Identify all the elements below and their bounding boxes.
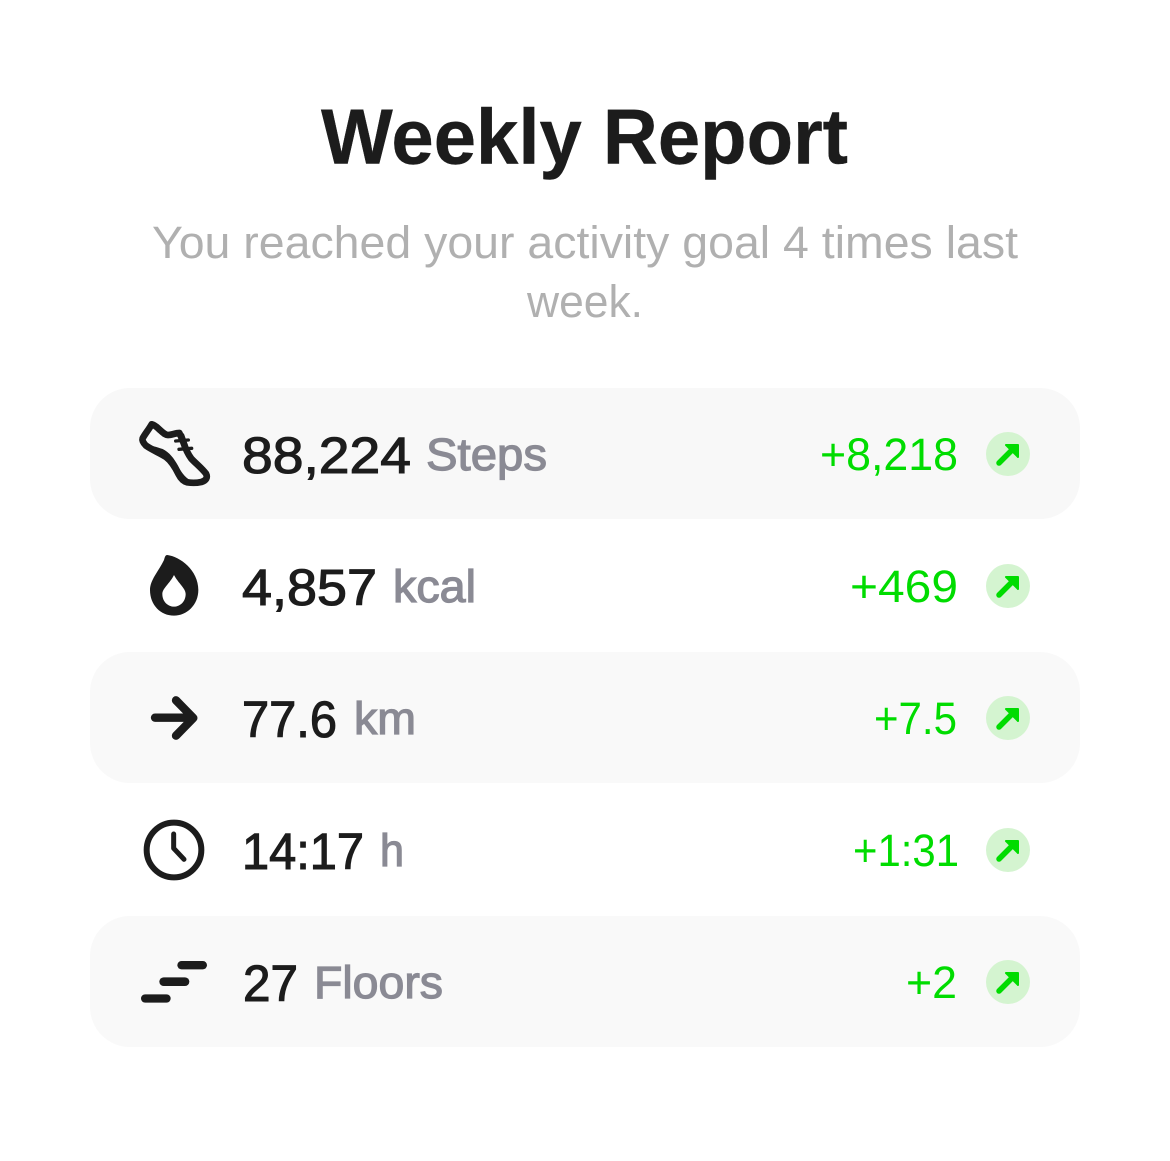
unit: floors: Floors (314, 957, 443, 1008)
title: Weekly Report (321, 92, 848, 180)
unit: steps: Steps (426, 429, 547, 480)
icon: clock (147, 823, 201, 877)
value: calories: 4,857 (242, 559, 377, 616)
subtitle: You reached your activity goal 4 times last (152, 217, 1019, 268)
subtitle (152, 217, 1019, 327)
panel: calories row (150, 555, 1030, 616)
value: duration: 14:17 (242, 823, 364, 880)
panel: steps row (90, 388, 1080, 519)
panel: floors row (90, 916, 1080, 1047)
change: duration: +1:31 (853, 825, 959, 876)
icon: up arrow badge (986, 696, 1030, 740)
change: floors: +2 (906, 957, 957, 1008)
panel: distance row (90, 652, 1080, 783)
change: steps: +8,218 (820, 429, 958, 480)
icon: running shoe (142, 424, 207, 485)
unit: duration: h (380, 825, 404, 876)
subtitle: week. (526, 276, 643, 327)
icon: up arrow badge (986, 564, 1030, 608)
value: floors: 27 (243, 955, 298, 1012)
unit: distance: km (354, 693, 416, 744)
unit: calories: kcal (393, 561, 476, 612)
change: distance: +7.5 (874, 693, 957, 744)
value: distance: 77.6 (242, 691, 337, 748)
icon: up arrow badge (986, 432, 1030, 476)
icon: stairs (141, 961, 207, 1003)
icon: right arrow (155, 700, 193, 736)
icon: up arrow badge (986, 828, 1030, 872)
panel: duration row (147, 823, 1030, 880)
value: steps: 88,224 (242, 427, 411, 484)
icon: flame (150, 555, 198, 616)
icon: up arrow badge (986, 960, 1030, 1004)
change: calories: +469 (850, 561, 958, 612)
